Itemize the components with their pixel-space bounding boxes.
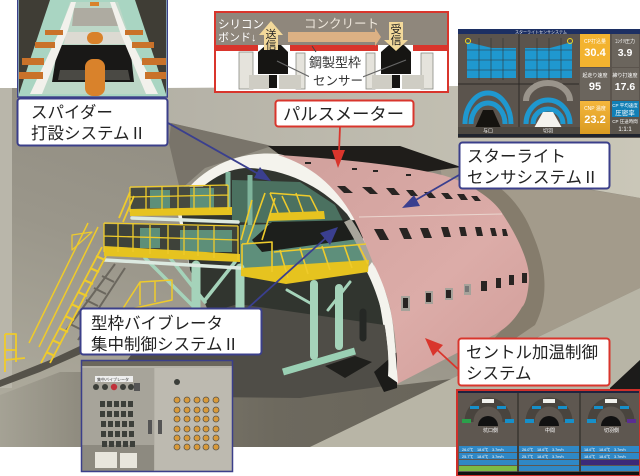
inset: heating control dashboard: 中間: [545, 427, 555, 434]
inset: starlight sensor dashboard: CP打込量: [584, 38, 606, 45]
inset: starlight sensor dashboard: 30.4: [584, 47, 607, 59]
inset: starlight sensor dashboard: 23.2: [584, 114, 606, 126]
inset: heating control dashboard: 26.0℃ 18.6℃ 3.7m/h: [462, 448, 504, 452]
inset: starlight sensor dashboard: CNP 温度: [584, 105, 606, 112]
inset: heating control dashboard: 坑口側: [483, 427, 498, 434]
inner lower deck: [241, 242, 369, 284]
label: vibrator central control: 集中制御システムⅡ: [91, 335, 239, 354]
inset: pulse meter sensor diagram: 受: [390, 23, 402, 36]
inset: pulse meter sensor diagram: 信: [266, 38, 276, 52]
inset: starlight sensor dashboard: CP 圧送時間: [612, 118, 638, 125]
inset: starlight sensor dashboard: 3.9: [618, 47, 632, 59]
arches: [465, 93, 570, 124]
inset: pulse meter sensor diagram: 信: [390, 33, 402, 47]
label: central heating control: システム: [466, 365, 532, 383]
form windows: [305, 162, 527, 311]
label: spider placing system: スパイダー: [31, 103, 113, 122]
bottom landing: [5, 334, 25, 372]
inset: starlight sensor dashboard: CP 平均速度: [612, 102, 638, 109]
inset: pulse meter sensor diagram: 送: [266, 27, 276, 41]
inset: starlight sensor dashboard: 95: [589, 81, 601, 93]
label: starlight sensor system: スターライト: [467, 147, 566, 166]
inset: starlight sensor dashboard: ｺﾝｸﾘ圧力: [615, 38, 635, 45]
inset: heating control dashboard: 18.6℃ 18.6℃ 3.7m/h: [584, 455, 626, 459]
inset: vibrator control panel photo: [82, 360, 232, 472]
arrow: spider: [168, 123, 271, 181]
red form plates: [216, 45, 447, 51]
inset: starlight sensor dashboard: [458, 28, 640, 138]
sensors: [258, 45, 411, 88]
inset: pulse meter sensor diagram: 鋼製型枠: [309, 55, 361, 70]
label: pulse meter: パルスメーター: [283, 104, 404, 124]
inset: starlight sensor dashboard: 17.6: [615, 81, 635, 93]
middle deck: [104, 223, 240, 262]
upper deck: [119, 185, 232, 222]
tunnel form interior: [100, 153, 397, 398]
label: spider placing system: [18, 98, 168, 146]
label: spider placing system: 打設システムⅡ: [31, 124, 146, 143]
inset: starlight sensor dashboard: 起走り速度: [582, 72, 608, 79]
inset: starlight sensor dashboard: スターライトセンサシステム: [515, 28, 567, 34]
lower small stair: [122, 280, 172, 310]
inset: heating control dashboard: 切羽側: [604, 427, 619, 434]
label: central heating control: [458, 338, 610, 386]
arrow: vibrator control: [248, 227, 338, 308]
yellow scaffolding decks and stairs: [5, 185, 369, 372]
inset: pulse meter sensor diagram: ボンド↓: [218, 31, 256, 44]
inner upper deck: [241, 193, 325, 244]
inset: heating control dashboard: 25.7℃ 18.6℃ 3.7m/h: [462, 455, 504, 459]
inset: starlight sensor dashboard: 1:1:1: [618, 127, 632, 133]
green support frame: [105, 172, 363, 372]
inset: heating control dashboard: 26.0℃ 18.6℃ 3.7m/h: [522, 448, 564, 452]
main stair: [29, 223, 106, 363]
inset: starlight sensor dashboard: 与口: [483, 128, 493, 134]
inset: pulse meter sensor diagram: [215, 12, 448, 92]
inset: starlight sensor dashboard: 圧密率: [615, 108, 635, 117]
dark switch rows: [100, 404, 136, 444]
inset: spider placing system render: [17, 0, 168, 97]
label: vibrator central control: 型枠バイブレータ: [91, 313, 223, 333]
inset: heating control dashboard: 18.6℃ 18.6℃ 3.7m/h: [584, 448, 626, 452]
label: starlight sensor system: センサシステムⅡ: [467, 169, 599, 187]
arch gauges: [469, 402, 630, 422]
label: pulse meter: [276, 100, 414, 126]
black crown gap above the form: [268, 146, 461, 172]
rock tunnel wall: [440, 165, 640, 362]
pressure grids: [467, 42, 572, 78]
data rows: [459, 446, 639, 471]
inset: pulse meter sensor diagram: シリコン: [218, 19, 264, 31]
arrow: pulse meter: [332, 127, 345, 168]
value tiles: [580, 34, 610, 67]
inset: pulse meter sensor diagram: センサー: [313, 74, 363, 88]
arrow: heating control: [425, 338, 459, 370]
arrow: starlight sensor: [402, 175, 459, 208]
inset: heating control dashboard: 25.7℃ 18.6℃ 3.7m/h: [522, 455, 564, 459]
pointer arrows: [168, 123, 459, 370]
tunnel background: [0, 86, 640, 447]
inset: vibrator control panel photo: 集中バイブレータ: [97, 376, 129, 382]
label: vibrator central control: [80, 308, 262, 354]
label: starlight sensor system: [460, 142, 610, 188]
inset: starlight sensor dashboard: 締り打速度: [612, 72, 638, 79]
steel form sections: [239, 52, 433, 89]
gray ladder shadow: [65, 264, 125, 340]
inset: heating control dashboard: [457, 390, 640, 476]
orange selector knobs: [174, 397, 219, 450]
inset: pulse meter sensor diagram: コンクリート: [304, 17, 379, 31]
inset: starlight sensor dashboard: 切羽: [543, 128, 553, 134]
transmit and receive arrows: [288, 28, 381, 46]
label: central heating control: セントル加温制御: [466, 343, 598, 362]
pink steel form shell: [278, 155, 529, 384]
